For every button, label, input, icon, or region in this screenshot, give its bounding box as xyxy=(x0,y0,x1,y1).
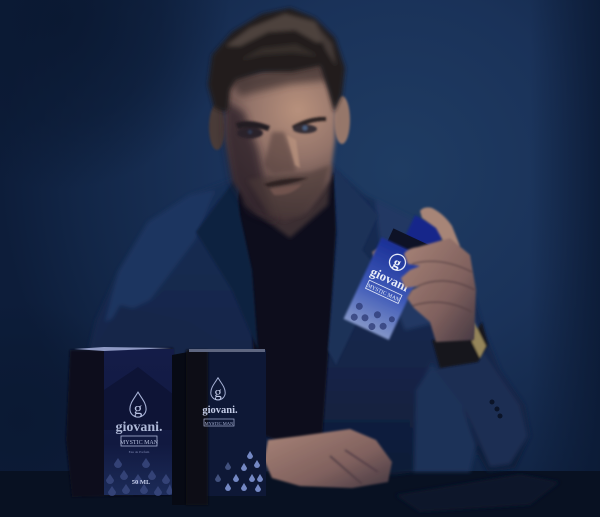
bottle logo: g xyxy=(390,255,403,272)
tin lid xyxy=(189,349,265,352)
perfume box left xyxy=(66,347,174,497)
watch xyxy=(432,322,488,368)
black shirt xyxy=(234,172,336,445)
jacket body and arms xyxy=(68,168,530,475)
bottle body xyxy=(344,237,427,340)
raised hand fingers xyxy=(401,207,476,342)
stubble and jaw shading xyxy=(248,165,330,216)
forehead shadow under hair xyxy=(228,60,330,96)
bottle neck xyxy=(388,228,433,260)
raised hand thumb xyxy=(372,246,390,268)
brand name: giovani. xyxy=(115,420,163,435)
variant label: MYSTIC MAN xyxy=(120,440,159,446)
logo drop and g: g xyxy=(214,385,222,401)
variant label xyxy=(120,436,159,446)
jacket cuff buttons xyxy=(490,400,502,418)
neck xyxy=(238,165,332,238)
lapels xyxy=(196,168,378,365)
mouth xyxy=(264,178,308,187)
bottle label: MYSTIC MAN xyxy=(366,283,400,303)
descriptor: Eau de Parfum xyxy=(129,450,150,454)
drop pattern xyxy=(106,458,172,496)
table xyxy=(0,471,600,517)
variant label xyxy=(204,419,234,426)
resting hand xyxy=(264,429,392,488)
bottle brand: giovani xyxy=(368,264,412,295)
bottle in hand xyxy=(344,206,446,342)
hair xyxy=(208,8,345,112)
volume: 50 ML xyxy=(132,479,151,486)
brand name: giovani. xyxy=(202,405,238,416)
perfume tin right xyxy=(172,349,266,505)
nose xyxy=(264,132,296,174)
face shadow left side xyxy=(224,100,276,222)
ears xyxy=(209,96,350,150)
bottle cap xyxy=(405,215,446,251)
index finger xyxy=(420,207,460,250)
logo drop and g xyxy=(130,392,146,418)
eyes and brows xyxy=(236,117,326,138)
logo drop and g xyxy=(211,378,225,401)
dark chevron on box xyxy=(104,367,174,430)
bottle pattern xyxy=(349,300,396,337)
finger lines xyxy=(330,450,378,484)
logo drop and g: g xyxy=(134,399,143,418)
variant label: MYSTIC MAN xyxy=(205,421,234,426)
drop pattern xyxy=(215,451,263,492)
box lid highlight xyxy=(74,347,172,351)
man xyxy=(68,8,530,488)
face xyxy=(224,62,336,221)
palm and remaining fingers xyxy=(401,238,476,342)
